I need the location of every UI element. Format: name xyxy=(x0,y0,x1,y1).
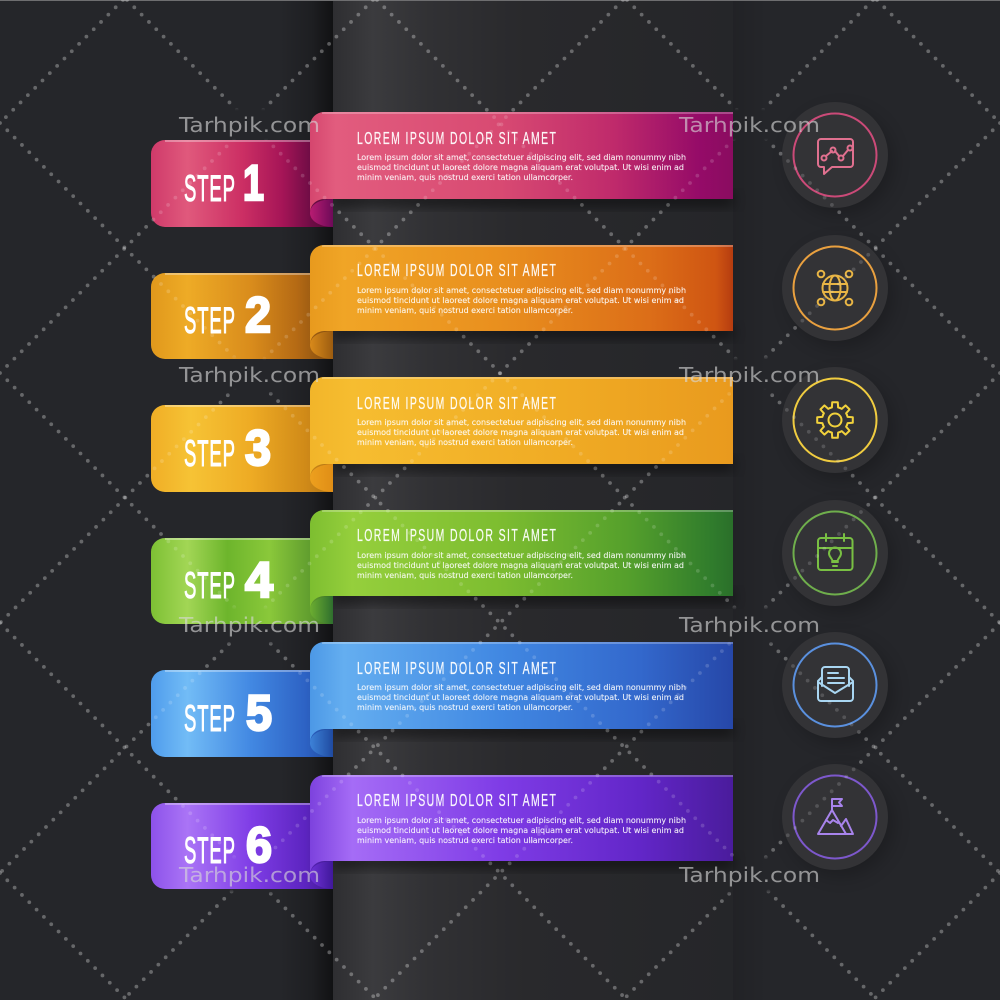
step 1 tab xyxy=(151,140,333,227)
step 3 ribbon: minim veniam, quis nostrud exerci tation ullamcorper. xyxy=(357,438,573,447)
step 5 tab: STEP xyxy=(184,699,235,740)
step 6 ribbon shadow xyxy=(333,856,733,868)
step 2 ribbon xyxy=(310,245,733,359)
watermark text: Tarhpik.com xyxy=(678,613,820,637)
step 1 ribbon: Lorem ipsum dolor sit amet, consectetuer adipiscing elit, sed diam nonummy nibh xyxy=(357,153,686,162)
step 4 ribbon: minim veniam, quis nostrud exerci tation ullamcorper. xyxy=(357,571,573,580)
step 6 tab xyxy=(151,803,333,889)
step 1 ribbon xyxy=(310,112,733,227)
step 5 tab xyxy=(151,670,333,757)
step 4 ribbon shadow xyxy=(333,591,733,603)
step 6 ribbon: euismod tincidunt ut laoreet dolore magna aliquam erat volutpat. Ut wisi enim ad xyxy=(357,826,684,835)
step 2 tab: 2 xyxy=(245,287,271,343)
step 3 ribbon xyxy=(310,377,733,492)
step 3 tab: STEP xyxy=(184,434,235,475)
step 4 ribbon: euismod tincidunt ut laoreet dolore magna aliquam erat volutpat. Ut wisi enim ad xyxy=(357,561,684,570)
step 2 ribbon: euismod tincidunt ut laoreet dolore magna aliquam erat volutpat. Ut wisi enim ad xyxy=(357,296,684,305)
step 6 ribbon: Lorem ipsum dolor sit amet, consectetuer adipiscing elit, sed diam nonummy nibh xyxy=(357,816,686,825)
step 4 ribbon: LOREM IPSUM DOLOR SIT AMET xyxy=(357,526,556,546)
step 6 ribbon: minim veniam, quis nostrud exerci tation ullamcorper. xyxy=(357,836,573,845)
step 6 row xyxy=(151,764,893,889)
step 5 ribbon xyxy=(310,642,733,757)
step 3 row xyxy=(151,367,893,492)
watermark text: Tarhpik.com xyxy=(178,363,320,387)
step 5 ribbon: LOREM IPSUM DOLOR SIT AMET xyxy=(357,659,556,679)
step 6 ribbon: LOREM IPSUM DOLOR SIT AMET xyxy=(357,791,556,811)
step 1 ribbon: minim veniam, quis nostrud exerci tation ullamcorper. xyxy=(357,173,573,182)
step 4 tab xyxy=(151,538,333,624)
step 2 tab xyxy=(151,273,333,359)
icon: chart speech bubble xyxy=(782,102,893,214)
step 2 ribbon shadow xyxy=(333,326,733,338)
step 1 tab: STEP xyxy=(184,169,235,210)
step 6 tab: STEP xyxy=(184,831,235,872)
watermark text: Tarhpik.com xyxy=(178,613,320,637)
step 1 ribbon: euismod tincidunt ut laoreet dolore magna aliquam erat volutpat. Ut wisi enim ad xyxy=(357,163,684,172)
step 5 ribbon: euismod tincidunt ut laoreet dolore magna aliquam erat volutpat. Ut wisi enim ad xyxy=(357,693,684,702)
step 2 tab: STEP xyxy=(184,301,235,342)
step 3 ribbon: euismod tincidunt ut laoreet dolore magna aliquam erat volutpat. Ut wisi enim ad xyxy=(357,428,684,437)
icon: open envelope xyxy=(782,632,893,744)
step 2 ribbon: minim veniam, quis nostrud exerci tation ullamcorper. xyxy=(357,306,573,315)
watermark text: Tarhpik.com xyxy=(178,863,320,887)
step 3 ribbon shadow xyxy=(333,459,733,471)
step 4 tab: STEP xyxy=(184,566,235,607)
icon: globe network xyxy=(782,235,893,347)
step 3 ribbon: Lorem ipsum dolor sit amet, consectetuer adipiscing elit, sed diam nonummy nibh xyxy=(357,418,686,427)
watermark text: Tarhpik.com xyxy=(678,363,820,387)
icon: mountain flag xyxy=(782,764,893,876)
watermark text: Tarhpik.com xyxy=(678,863,820,887)
step 4 ribbon xyxy=(310,510,733,624)
step 2 row xyxy=(151,235,893,359)
step 5 ribbon: minim veniam, quis nostrud exerci tation ullamcorper. xyxy=(357,703,573,712)
step 5 tab: 5 xyxy=(246,685,272,741)
step 1 ribbon: LOREM IPSUM DOLOR SIT AMET xyxy=(357,129,556,149)
step 1 row xyxy=(151,102,893,227)
step 4 tab: 4 xyxy=(245,552,273,608)
step 6 ribbon xyxy=(310,775,733,889)
step 6 tab: 6 xyxy=(246,817,272,873)
step 5 ribbon shadow xyxy=(333,724,733,736)
step 5 ribbon: Lorem ipsum dolor sit amet, consectetuer adipiscing elit, sed diam nonummy nibh xyxy=(357,683,686,692)
icon: gear xyxy=(782,367,893,479)
icon: calendar with bulb xyxy=(782,500,893,612)
step 3 tab xyxy=(151,405,333,492)
step 4 ribbon: Lorem ipsum dolor sit amet, consectetuer adipiscing elit, sed diam nonummy nibh xyxy=(357,551,686,560)
step 3 tab: 3 xyxy=(245,420,271,476)
step 4 row xyxy=(151,500,893,624)
watermark text: Tarhpik.com xyxy=(678,113,820,137)
step 1 ribbon shadow xyxy=(333,194,733,206)
step 3 ribbon: LOREM IPSUM DOLOR SIT AMET xyxy=(357,394,556,414)
step 1 tab: 1 xyxy=(243,155,264,211)
step 2 ribbon: LOREM IPSUM DOLOR SIT AMET xyxy=(357,261,556,281)
watermark text: Tarhpik.com xyxy=(178,113,320,137)
step 5 row xyxy=(151,632,893,757)
step 2 ribbon: Lorem ipsum dolor sit amet, consectetuer adipiscing elit, sed diam nonummy nibh xyxy=(357,286,686,295)
watermark text xyxy=(178,113,820,887)
